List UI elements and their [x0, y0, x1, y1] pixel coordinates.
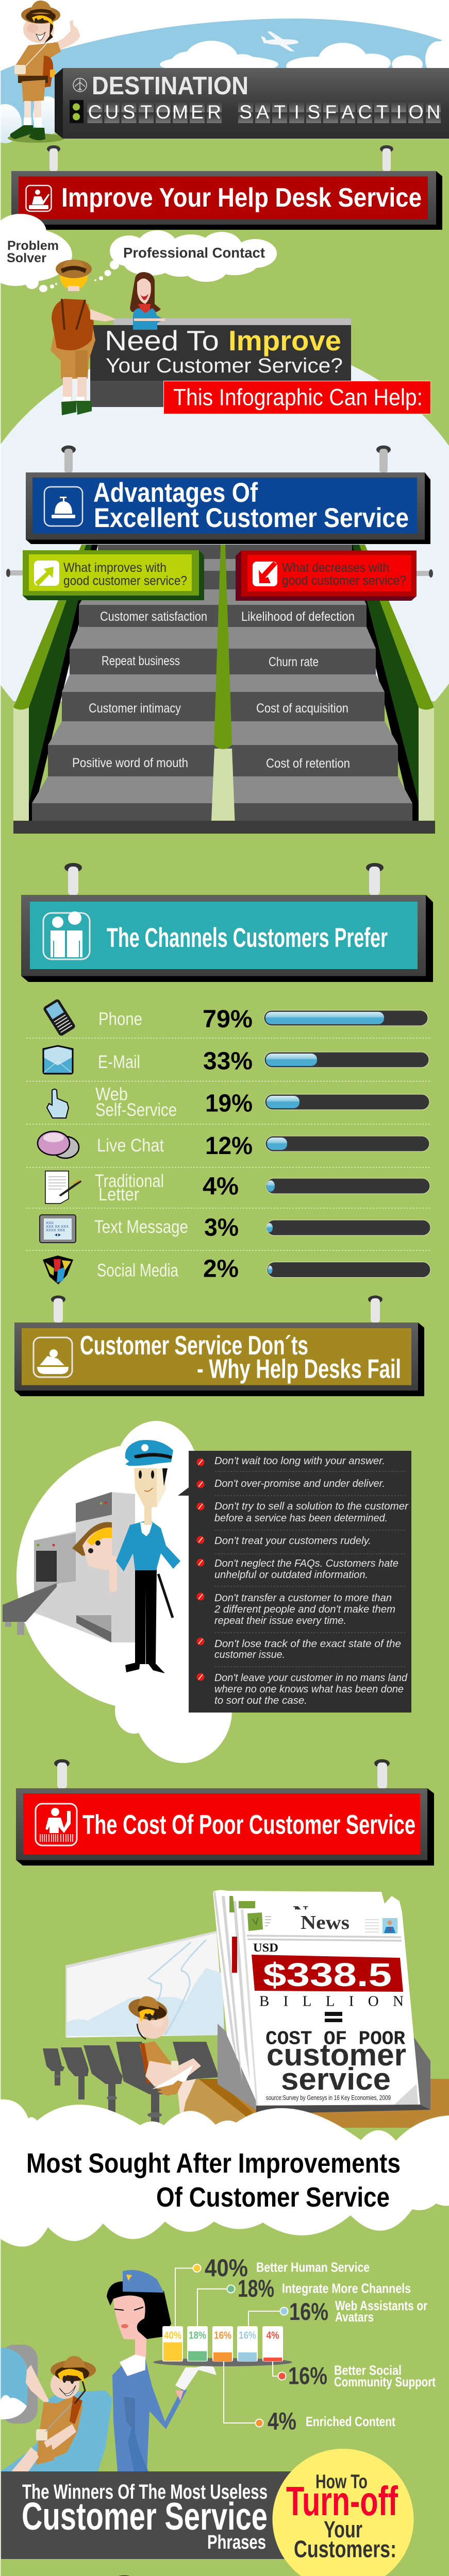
row: text message: XXX: [46, 1221, 54, 1225]
light circle backdrop: [0, 365, 449, 701]
row: text message: 3%: [204, 1214, 239, 1242]
icon: cashier with barcode: [36, 1804, 77, 1845]
step labels: [72, 609, 355, 771]
flip letters: O: [409, 101, 423, 123]
back newspaper pages: News: [293, 1902, 342, 1924]
seat and airplane window: [0, 2345, 112, 2471]
row: e-mail: E-Mail: [98, 1052, 140, 1072]
section sign: improve your help desk service: [11, 171, 442, 230]
panel: customer service don'ts list: [178, 1451, 411, 1713]
thought cloud: professional contact: [94, 230, 277, 282]
flip letters: T: [274, 101, 286, 123]
list text: before a service has been determined.: [214, 1513, 388, 1524]
explorer thumbs up: [10, 1, 80, 140]
leader lines: [175, 2268, 281, 2423]
banner: winners of the most useless phrases: The Winners Of The Most Useless: [22, 2481, 268, 2503]
portrait: headset agent: [97, 2575, 156, 2576]
row: traditional letter: Traditional: [95, 1171, 164, 1191]
list text: Don't neglect the FAQs. Customers hate: [214, 1558, 398, 1569]
row: phone: Phone: [98, 1009, 142, 1029]
step labels: Cost of acquisition: [256, 701, 348, 716]
explorer viewed from behind: [51, 260, 116, 415]
thought cloud: professional contact: Professional Contact: [123, 245, 265, 261]
flip letters: S: [239, 101, 252, 123]
sign posts: [61, 446, 391, 473]
notice board: need to improve your customer service: Need To: [105, 325, 219, 357]
row: text message: Text Message: [94, 1217, 188, 1237]
headline: cost of poor customer service: [265, 2028, 406, 2102]
section sign: the cost of poor customer service: [16, 1788, 434, 1866]
chart: improvements on tray: [153, 2254, 436, 2435]
improvement labels: Integrate More Channels: [282, 2281, 411, 2296]
white blob behind officer: [16, 1421, 282, 1763]
list text: 2 different people and don't make them: [214, 1604, 395, 1615]
dots: [193, 2264, 288, 2427]
percentages: 4%: [268, 2408, 296, 2435]
yellow circle: how to turn-off your customers: Your: [324, 2516, 362, 2543]
yellow circle: how to turn-off your customers: How To: [315, 2471, 368, 2493]
row: text message: XXX XX XXX: [46, 1224, 69, 1229]
ground shadow under sign: [8, 133, 64, 143]
phrase 1: call is important: [97, 2575, 412, 2576]
banner: winners of the most useless phrases: Phrases: [207, 2532, 266, 2553]
row: traditional letter: 4%: [203, 1173, 239, 1200]
list text: unhelpful or outdated information.: [214, 1569, 368, 1581]
flip letters: [88, 101, 441, 123]
flip letters: T: [140, 101, 152, 123]
staircase: [13, 545, 435, 834]
sign posts: [64, 863, 384, 895]
flip letters: N: [427, 101, 440, 123]
row: live chat: 12%: [205, 1132, 253, 1160]
sky with clouds and plane: [0, 19, 449, 143]
heading: Advantages Of: [93, 478, 258, 508]
row: live chat: [38, 1131, 429, 1160]
flip letters: R: [207, 101, 221, 123]
improvement labels: Enriched Content: [306, 2414, 395, 2429]
flip letters: I: [294, 101, 300, 123]
flip letters: U: [105, 101, 119, 123]
headline: cost of poor customer service: source:Survey by Genesys in 16 Key Economies, 2009: [266, 2094, 391, 2102]
red sign: what decreases: What decreases with: [282, 561, 389, 575]
heading: Customer Service Don´ts: [80, 1331, 308, 1361]
list text: Don't over-promise and under deliver.: [214, 1478, 385, 1489]
notice board: need to improve your customer service: Improve: [228, 325, 341, 357]
holder front: [256, 2105, 430, 2114]
heading: destination: DESTINATION: [92, 72, 248, 100]
holder back: [412, 2035, 430, 2110]
row: e-mail: [43, 1045, 429, 1075]
improvement labels: Better Social: [334, 2363, 402, 2378]
row: phone: [42, 998, 428, 1037]
sign posts: [47, 145, 393, 172]
step labels: Churn rate: [269, 655, 319, 669]
explorer in seat: [11, 2356, 96, 2471]
step base: [13, 821, 435, 834]
officer: [116, 1440, 180, 1673]
row: web self-service: Self-Service: [95, 1100, 177, 1120]
sign posts: [54, 1759, 390, 1789]
notice board: need to improve your customer service: Your Customer Service?: [106, 354, 343, 377]
stewardess with tray: [107, 2270, 217, 2471]
row: web self-service: Web: [95, 1084, 128, 1105]
masthead: [247, 1912, 402, 1941]
step labels: Positive word of mouth: [72, 756, 188, 770]
icon: agent at desk: [34, 1337, 72, 1377]
list text: Don't lose track of the exact state of the: [214, 1638, 401, 1650]
percentages: 18%: [238, 2275, 274, 2302]
red sign: what decreases: [236, 550, 433, 601]
front page: [241, 1909, 420, 2106]
usd label: USD: [253, 1941, 278, 1954]
list text: Don't treat your customers rudely.: [214, 1535, 371, 1547]
newspaper rack: [213, 1890, 430, 2114]
icon: plane in circle: [73, 78, 87, 92]
steps: [32, 559, 412, 803]
row: traditional letter: Letter: [98, 1184, 139, 1205]
step labels: Customer intimacy: [89, 701, 181, 716]
no-entry icons: [197, 1458, 204, 1681]
yellow circle: how to turn-off your customers: Customers:: [294, 2536, 396, 2563]
green sign: what improves: [6, 550, 204, 600]
left edge line: [0, 67, 1, 2576]
airport window screen: [65, 1931, 224, 2038]
icon: plane: [261, 31, 298, 52]
woman in blue top: [130, 272, 165, 330]
improvement labels: Avatars: [335, 2309, 374, 2325]
chart: channel preference bars: [26, 998, 430, 1284]
flip letters: S: [307, 101, 320, 123]
row: web self-service: [47, 1084, 429, 1120]
row: phone: 79%: [203, 1006, 253, 1033]
flip letters: A: [342, 101, 355, 123]
headline: cost of poor customer service: customer: [267, 2038, 406, 2072]
row: social media: [43, 1256, 430, 1284]
flip letters: T: [376, 101, 388, 123]
glasses: 16%: [239, 2330, 256, 2342]
flip letters: A: [256, 101, 269, 123]
icon: down arrow: [253, 562, 277, 586]
flip letters: E: [191, 101, 204, 123]
glasses: [162, 2326, 283, 2362]
row: text message: [40, 1214, 430, 1243]
improvement labels: Better Human Service: [256, 2259, 370, 2275]
section sign: customer service don'ts: [14, 1323, 424, 1396]
flip letters: C: [358, 101, 372, 123]
notice board: need to improve your customer service: [90, 318, 351, 407]
icon: two people talking: [43, 911, 90, 959]
step labels: Cost of retention: [266, 756, 350, 771]
list text: where no one knows what has been done: [214, 1684, 404, 1695]
list text: Don't leave your customer in no mans land: [214, 1672, 408, 1684]
waiting room seats: [43, 2042, 219, 2125]
list text: Don't wait too long with your answer.: [214, 1455, 385, 1467]
banner: winners of the most useless phrases: Customer Service: [22, 2495, 268, 2538]
list text: [214, 1455, 409, 1706]
list text: customer issue.: [214, 1649, 285, 1660]
glasses: 18%: [189, 2330, 206, 2342]
percentages: [205, 2254, 328, 2435]
icon: help desk: [26, 185, 52, 211]
percentages: 40%: [205, 2254, 248, 2281]
green sign: what improves: What improves with: [63, 561, 167, 575]
figure: 338.5 billion: $338.5: [263, 1956, 392, 1993]
brown floor: [183, 2079, 449, 2128]
sign posts: [51, 1295, 383, 1323]
headline: cost of poor customer service: service: [281, 2062, 391, 2096]
section sign: the channels customers prefer: [21, 895, 433, 982]
left rail: [13, 545, 98, 821]
glasses: 16%: [214, 2330, 231, 2342]
percentages: 16%: [288, 2362, 327, 2389]
security scanner with explorer: [3, 1492, 135, 1642]
row: traditional letter: [45, 1171, 430, 1205]
list text: repeat their issue every time.: [214, 1615, 346, 1626]
icon: up arrow: [34, 561, 59, 586]
headline: cost of poor customer service: COST OF POOR: [265, 2028, 405, 2050]
indicator lights: [70, 100, 84, 123]
flip letters: C: [88, 101, 102, 123]
step labels: Repeat business: [102, 654, 180, 668]
white cloud band with heading: Of Customer Service: [156, 2182, 390, 2213]
flip letters: O: [156, 101, 171, 123]
center rail: [211, 545, 235, 821]
improvement labels: [256, 2259, 436, 2429]
glasses: 40%: [164, 2330, 181, 2342]
row: live chat: Live Chat: [97, 1136, 164, 1156]
list text: Don't try to sell a solution to the customer: [214, 1501, 409, 1512]
green sign: what improves: good customer service?: [63, 574, 187, 588]
explorer peeking: [72, 1522, 117, 1592]
yellow circle: how to turn-off your customers: [272, 2449, 413, 2576]
icon: service bell: [44, 487, 82, 526]
white cloud band with heading: [0, 2099, 449, 2247]
figure: 338.5 billion: [252, 1955, 404, 2022]
flip letters: S: [123, 101, 135, 123]
step labels: Customer satisfaction: [100, 609, 207, 624]
improvement labels: Web Assistants or: [335, 2298, 427, 2313]
list text: to sort out the case.: [214, 1695, 307, 1706]
flip letters: M: [172, 101, 188, 123]
row: web self-service: 19%: [205, 1090, 253, 1117]
section sign: advantages of excellent customer service: [26, 472, 430, 544]
callout: this infographic can help: This Infographic Can Help:: [173, 384, 423, 410]
flip letters: I: [396, 101, 402, 123]
row: social media: 2%: [203, 1256, 239, 1283]
red sign: what decreases: good customer service?: [282, 573, 406, 588]
step labels: Likelihood of defection: [241, 609, 355, 624]
section sign: advantages of excellent customer service: Excellent Customer Service: [94, 503, 409, 533]
thought cloud: problem solver: Problem: [7, 239, 59, 253]
list text: Don't transfer a customer to more than: [214, 1592, 392, 1604]
masthead: News: [301, 1912, 350, 1934]
thought cloud: problem solver: Solver: [7, 251, 46, 265]
glasses: 4%: [266, 2330, 279, 2342]
right rail: [346, 545, 434, 821]
back newspaper pages: [213, 1890, 420, 2105]
yellow circle: how to turn-off your customers: Turn-off: [286, 2478, 398, 2524]
row: e-mail: 33%: [203, 1048, 253, 1075]
percentages: 16%: [289, 2298, 328, 2325]
flip letters: F: [325, 101, 337, 123]
row: social media: Social Media: [97, 1260, 178, 1280]
banner: winners of the most useless phrases: [1, 2471, 310, 2559]
departure board: destination customer satisfaction: [55, 68, 449, 139]
thought cloud: problem solver: [0, 214, 72, 292]
figure: 338.5 billion: BILLION: [259, 1993, 404, 2010]
row: text message: XXXX XXX: [46, 1228, 65, 1232]
explorer reading newspaper: [127, 1996, 201, 2123]
